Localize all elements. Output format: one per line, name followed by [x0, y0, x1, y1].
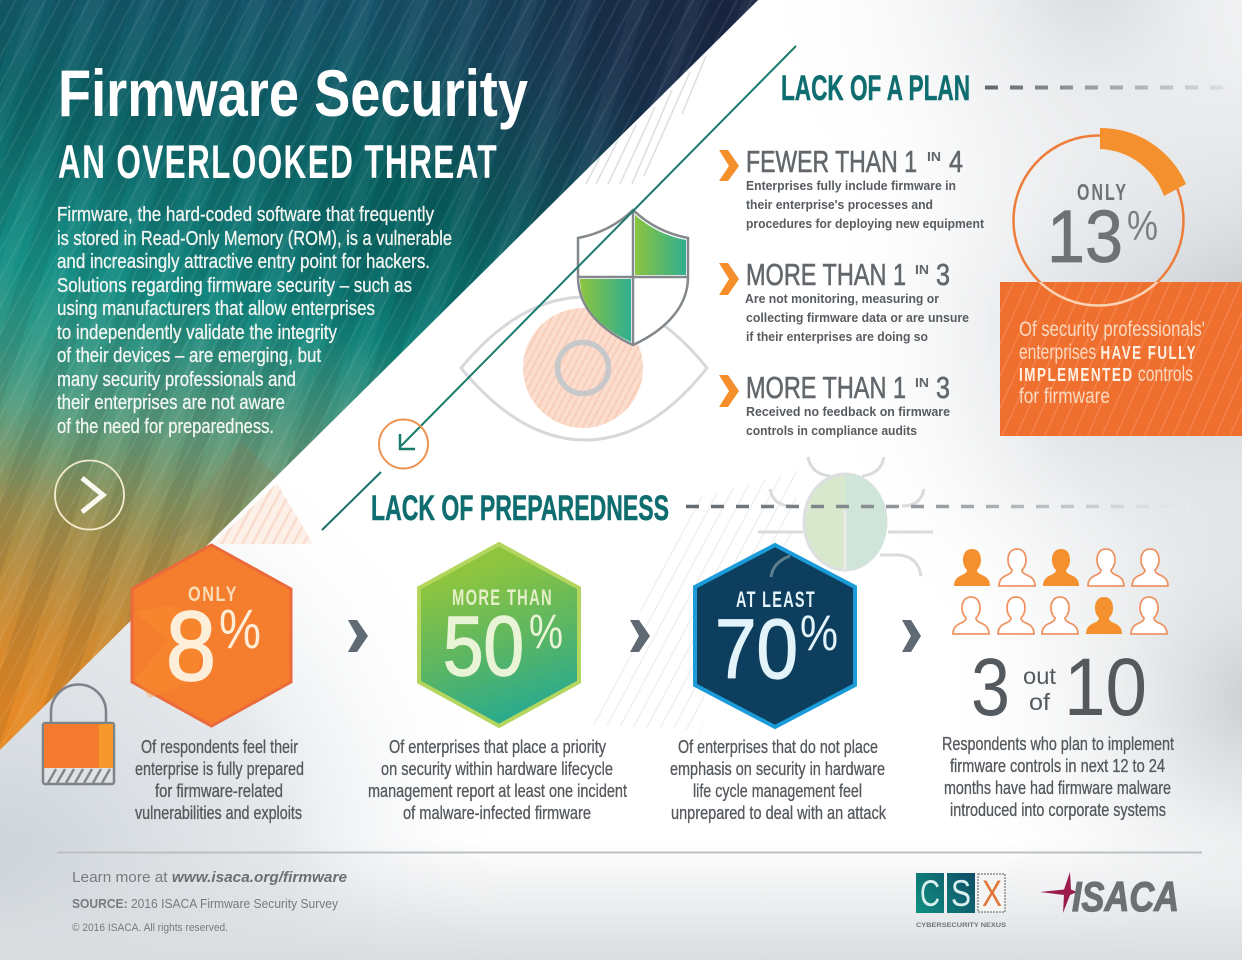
- logo: CSX: [916, 873, 1007, 929]
- caption: 50 percent: Of enterprises that place a priority: [389, 737, 606, 757]
- caption: 3 out of 10: Respondents who plan to implement: [942, 734, 1174, 754]
- stat hexagon: at least 70 percent: %: [800, 605, 838, 661]
- stat hexagon: more than 50 percent: 50: [443, 599, 524, 693]
- caption: 50 percent: management report at least one incident: [368, 781, 627, 801]
- stat: 3 out of 10: out: [1023, 663, 1057, 689]
- list item: more than 1 in 3 feedback: 3: [936, 370, 950, 405]
- footer text: Learn more at www.isaca.org/firmware: [72, 869, 347, 886]
- icon: eye: [461, 297, 707, 440]
- callout: 13 percent: %: [1127, 202, 1158, 249]
- stat hexagon: more than 50 percent: [419, 544, 579, 726]
- footer text: SOURCE: 2016 ISACA Firmware Security Survey: [72, 897, 339, 911]
- stat hexagon: more than 50 percent: %: [529, 606, 563, 659]
- accent line beside preparedness heading: [322, 472, 381, 530]
- intro paragraph: Firmware, the hard-coded software that frequently: [57, 204, 434, 226]
- intro paragraph: is stored in Read-Only Memory (ROM), is a vulnerable: [57, 228, 452, 250]
- list item: fewer than 1 in 4: Enterprises fully include firmware in: [746, 178, 956, 193]
- stat: 3 out of 10: of: [1029, 689, 1051, 715]
- logo: CSX: C: [920, 873, 940, 914]
- footer text: [72, 869, 347, 934]
- logo: CSX: X: [982, 873, 1002, 914]
- list item: more than 1 in 3: IN: [915, 262, 929, 277]
- callout: 13 percent: ONLY: [1077, 179, 1128, 205]
- logo: CSX: CYBERSECURITY NEXUS: [916, 922, 1007, 929]
- caption: 50 percent: of malware-infected firmware: [403, 803, 591, 823]
- caption: 3 out of 10: firmware controls in next 12 to 24: [950, 756, 1165, 776]
- icon: circled chevron: [55, 460, 124, 530]
- callout: 13 percent: [1000, 128, 1242, 436]
- callout: 13 percent: for firmware: [1019, 385, 1110, 408]
- logo: ISACA: [1040, 872, 1179, 920]
- intro paragraph: to independently validate the integrity: [57, 322, 337, 344]
- list item: fewer than 1 in 4: 4: [949, 144, 963, 179]
- intro paragraph: of their devices – are emerging, but: [57, 345, 321, 367]
- caption: 50 percent: on security within hardware lifecycle: [381, 759, 613, 779]
- stat hexagon: at least 70 percent: AT LEAST: [736, 587, 816, 612]
- arrow: chevron after 8 percent: [348, 620, 368, 652]
- subtitle: AN OVERLOOKED THREAT: [58, 135, 498, 188]
- caption: 3 out of 10: [942, 734, 1174, 820]
- arrow: chevron after 70 percent: [902, 620, 921, 652]
- callout: 13 percent: 13: [1047, 195, 1123, 278]
- callout: 13 percent: IMPLEMENTED controls: [1019, 363, 1193, 386]
- caption: 70 percent: unprepared to deal with an attack: [671, 803, 887, 823]
- icon: bug: [758, 457, 933, 576]
- caption: 70 percent: Of enterprises that do not place: [678, 737, 878, 757]
- list item: fewer than 1 in 4: their enterprise's processes and: [746, 197, 933, 212]
- hatched stripes behind the stat hexagons: [590, 470, 800, 730]
- caption: 8 percent: for firmware-related: [155, 781, 283, 801]
- stat: 3 out of 10: [971, 642, 1147, 733]
- intro paragraph: and increasingly attractive entry point for hackers.: [57, 251, 430, 273]
- logo: ISACA: ISACA: [1072, 873, 1179, 920]
- caption: 70 percent: [670, 737, 887, 823]
- arrow: diagonal line into circle: [379, 46, 796, 468]
- callout: 13 percent: enterprises HAVE FULLY: [1019, 341, 1197, 364]
- stat: 3 out of 10: 3: [971, 642, 1010, 733]
- caption: 50 percent: [368, 737, 627, 823]
- intro paragraph: their enterprises are not aware: [57, 392, 285, 414]
- heading: lack of preparedness: LACK OF PREPAREDNESS: [371, 489, 669, 528]
- icon: peach triangle: [213, 483, 313, 544]
- arrow: chevron after 50 percent: [630, 620, 650, 652]
- list item: fewer than 1 in 4: procedures for deploying new equipment: [746, 216, 985, 231]
- icon: shield: [578, 210, 688, 345]
- list item: fewer than 1 in 4: IN: [927, 149, 941, 164]
- list item: more than 1 in 3 feedback: MORE THAN 1: [746, 370, 906, 405]
- caption: 3 out of 10: months have had firmware malware: [944, 778, 1171, 798]
- stat hexagon: only 8 percent: [132, 545, 291, 726]
- stat hexagon: more than 50 percent: MORE THAN: [452, 585, 553, 610]
- list item: more than 1 in 3 feedback: IN: [915, 375, 929, 390]
- footer text: © 2016 ISACA. All rights reserved.: [72, 922, 228, 934]
- hero diagonal panel: [0, 0, 758, 750]
- caption: 8 percent: [135, 737, 304, 823]
- heading: lack of a plan: LACK OF A PLAN: [781, 69, 970, 108]
- list item: more than 1 in 3: collecting firmware data or are unsure: [746, 310, 969, 325]
- list item: more than 1 in 3 feedback: [719, 370, 950, 438]
- list item: more than 1 in 3: Are not monitoring, measuring or: [745, 291, 939, 306]
- list item: more than 1 in 3: [719, 257, 969, 344]
- caption: 70 percent: emphasis on security in hardware: [670, 759, 885, 779]
- intro paragraph: many security professionals and: [57, 369, 296, 391]
- stat hexagon: only 8 percent: %: [219, 597, 261, 660]
- list item: more than 1 in 3: if their enterprises are doing so: [746, 329, 928, 344]
- stat hexagon: only 8 percent: ONLY: [188, 583, 238, 606]
- intro paragraph: Solutions regarding firmware security – such as: [57, 275, 412, 297]
- icon: padlock: [43, 685, 114, 784]
- stat hexagon: at least 70 percent: [695, 545, 855, 727]
- list item: fewer than 1 in 4: FEWER THAN 1: [746, 144, 917, 179]
- logo: CSX: S: [951, 873, 971, 914]
- caption: 70 percent: life cycle management feel: [693, 781, 862, 801]
- caption: 8 percent: vulnerabilities and exploits: [135, 803, 302, 823]
- stat: 3 out of 10: 10: [1064, 642, 1147, 733]
- people icon grid: 3 of 10 highlighted: [953, 549, 1168, 634]
- intro paragraph: using manufacturers that allow enterprises: [57, 298, 375, 320]
- caption: 8 percent: enterprise is fully prepared: [135, 759, 304, 779]
- list item: more than 1 in 3 feedback: controls in compliance audits: [746, 423, 917, 438]
- intro paragraph: [57, 204, 452, 438]
- grey accent lines above shield: [586, 56, 706, 184]
- list item: more than 1 in 3: 3: [936, 257, 950, 292]
- list item: more than 1 in 3 feedback: Received no feedback on firmware: [746, 404, 950, 419]
- stat hexagon: only 8 percent: 8: [166, 591, 216, 701]
- caption: 8 percent: Of respondents feel their: [141, 737, 298, 757]
- stat hexagon: at least 70 percent: 70: [715, 602, 798, 696]
- caption: 3 out of 10: introduced into corporate systems: [950, 800, 1166, 820]
- title: Firmware Security: [58, 56, 528, 130]
- list item: fewer than 1 in 4: [719, 144, 985, 231]
- list item: more than 1 in 3: MORE THAN 1: [746, 257, 906, 292]
- intro paragraph: of the need for preparedness.: [57, 416, 274, 438]
